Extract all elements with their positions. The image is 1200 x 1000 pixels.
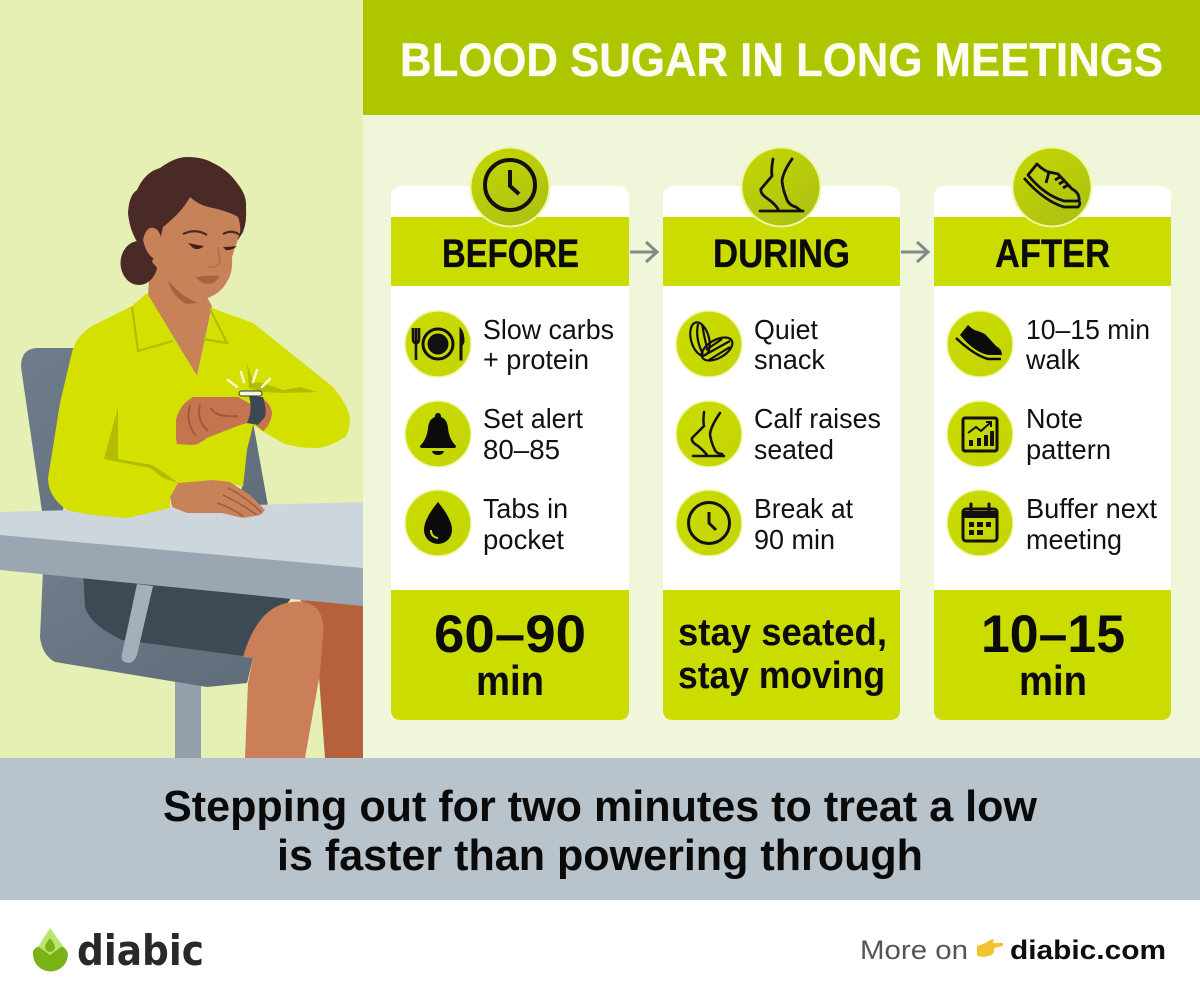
smartwatch <box>247 396 266 425</box>
duration: 60-90 min: 60–90 <box>434 605 586 664</box>
icon: foot <box>742 148 820 226</box>
icon: diabic logo <box>33 928 68 972</box>
illustration: woman checking watch at a desk <box>0 157 363 758</box>
header band <box>934 217 1171 286</box>
icon: drop <box>405 490 471 556</box>
text: note pattern: Note <box>1026 403 1083 434</box>
text: slow carbs: Slow carbs <box>483 314 614 345</box>
text: tabs in pocket: Tabs in <box>483 493 568 524</box>
icon: clock <box>470 148 550 226</box>
text: calf raises seated: seated <box>754 434 834 465</box>
icon: almonds <box>676 311 742 377</box>
bottom band <box>391 590 629 720</box>
finger lines <box>188 404 238 436</box>
text: tabs in pocket: pocket <box>483 524 564 555</box>
icon: clock <box>676 490 742 556</box>
arrow: before to during <box>630 242 657 262</box>
text: note pattern: pattern <box>1026 434 1111 465</box>
slogan: stay moving <box>678 655 885 697</box>
face <box>152 197 240 302</box>
takeaway text: Stepping out for two minutes to treat a low <box>163 782 1038 831</box>
back leg <box>300 600 363 758</box>
neck shadow <box>168 280 198 304</box>
ear <box>143 228 162 260</box>
slogan: stay seated, <box>678 612 887 654</box>
mouth <box>196 276 220 284</box>
text: calf raises seated: Calf raises <box>754 403 881 434</box>
front leg <box>243 602 323 758</box>
website: diabic.com <box>1010 935 1166 965</box>
watch face <box>239 391 262 396</box>
collar <box>132 307 227 351</box>
eyes <box>188 243 237 250</box>
footer <box>0 900 1200 1000</box>
icon: filled shoe <box>947 311 1013 377</box>
right background <box>363 0 1200 758</box>
arrow: during to after <box>901 242 928 262</box>
duration: 10-15 min: min <box>1019 657 1087 704</box>
card: after <box>934 148 1171 720</box>
heading: DURING <box>713 232 850 276</box>
eyebrows <box>183 231 240 235</box>
text: buffer next meeting: meeting <box>1026 524 1122 555</box>
watch sparks <box>228 370 270 387</box>
more on: More on <box>860 935 968 965</box>
title banner <box>363 0 1200 115</box>
duration: 10-15 min: 10–15 <box>981 605 1125 664</box>
sleeve crease <box>247 363 317 393</box>
bottom band <box>934 590 1171 720</box>
skirt <box>83 570 290 656</box>
heading: BEFORE <box>442 232 579 276</box>
shirt <box>48 293 350 518</box>
text: set alert: 80–85 <box>483 434 560 465</box>
neck and chest <box>148 262 212 376</box>
card: before <box>391 148 629 720</box>
chair back <box>21 348 268 525</box>
resting hand <box>170 480 265 518</box>
icon: calf raise foot <box>676 401 742 467</box>
chair seat <box>40 570 253 687</box>
icon: pointing hand <box>977 939 1003 957</box>
text: slow carbs: + protein <box>483 344 589 375</box>
table top <box>0 502 363 568</box>
chair post <box>175 680 201 758</box>
left background <box>0 0 363 758</box>
text: buffer next meeting: Buffer next <box>1026 493 1157 524</box>
icon: calendar <box>947 490 1013 556</box>
text: quiet snack: Quiet <box>754 314 818 345</box>
hand lines <box>217 488 262 516</box>
icon: running shoe <box>1012 148 1092 226</box>
brand name: diabic <box>77 926 204 975</box>
takeaway text: is faster than powering through <box>277 831 923 880</box>
icon: chart <box>947 401 1013 467</box>
text: break at 90 min: Break at <box>754 493 853 524</box>
icon: plate and cutlery <box>405 311 471 377</box>
text: walk: walk <box>1025 344 1081 375</box>
takeaway banner <box>0 758 1200 900</box>
header band <box>663 217 900 286</box>
title: BLOOD SUGAR IN LONG MEETINGS <box>400 33 1163 86</box>
text: set alert: Set alert <box>483 403 583 434</box>
heading: AFTER <box>995 232 1110 276</box>
raised hand <box>176 397 252 445</box>
text: quiet snack: snack <box>754 344 826 375</box>
hair <box>128 157 246 250</box>
nose <box>208 247 220 267</box>
table edge <box>0 535 363 606</box>
icon: bell <box>405 401 471 467</box>
card: during <box>663 148 900 720</box>
text: break at 90 min: 90 min <box>754 524 835 555</box>
duration: 60-90 min: min <box>476 657 544 704</box>
text: walk: 10–15 min <box>1026 314 1150 345</box>
shirt fold <box>104 407 178 483</box>
table leg <box>122 584 153 663</box>
hair bun <box>120 241 158 285</box>
header band <box>391 217 629 286</box>
bottom band <box>663 590 900 720</box>
wrist <box>256 398 272 431</box>
